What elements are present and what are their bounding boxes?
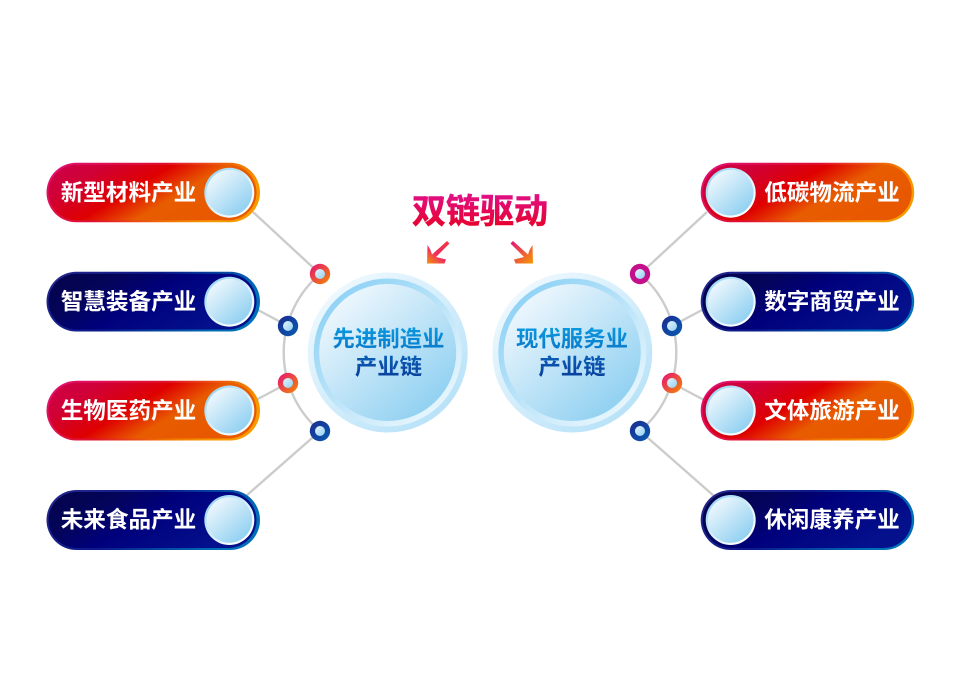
pill: 智慧装备产业: 智慧装备产业	[61, 290, 196, 314]
pill: 数字商贸产业: 数字商贸产业	[764, 290, 900, 314]
pill: 文体旅游产业	[701, 381, 914, 440]
arrow: right	[510, 241, 533, 264]
pill: 生物医药产业	[46, 381, 260, 440]
pill: 新型材料产业: 新型材料产业	[61, 180, 196, 206]
pill: 未来食品产业	[46, 490, 260, 550]
hub: 现代服务业产业链	[492, 272, 652, 432]
hub: 现代服务业产业链: 现代服务业	[516, 326, 628, 352]
pill: 生物医药产业: 生物医药产业	[61, 398, 196, 424]
pill: 未来食品产业: 未来食品产业	[61, 506, 196, 532]
pill: 数字商贸产业	[701, 272, 914, 332]
pill: 低碳物流产业	[701, 163, 914, 222]
connector lines and arcs	[246, 212, 714, 496]
hub: 先进制造业产业链: 产业链	[355, 354, 422, 380]
pill: 休闲康养产业	[701, 490, 914, 550]
hub: 先进制造业产业链	[308, 272, 468, 432]
hub: 先进制造业产业链: 先进制造业	[333, 326, 444, 352]
pill: 智慧装备产业	[46, 272, 260, 332]
node dots: left	[278, 264, 330, 441]
arrow: left	[427, 241, 450, 264]
pill: 低碳物流产业: 低碳物流产业	[764, 180, 900, 206]
pill: 新型材料产业	[46, 163, 260, 222]
pill: 休闲康养产业: 休闲康养产业	[764, 506, 900, 532]
node dots: right	[630, 264, 682, 441]
pill: 文体旅游产业: 文体旅游产业	[764, 398, 900, 424]
title: 双链驱动	[412, 193, 548, 231]
hub: 现代服务业产业链: 产业链	[538, 354, 606, 380]
